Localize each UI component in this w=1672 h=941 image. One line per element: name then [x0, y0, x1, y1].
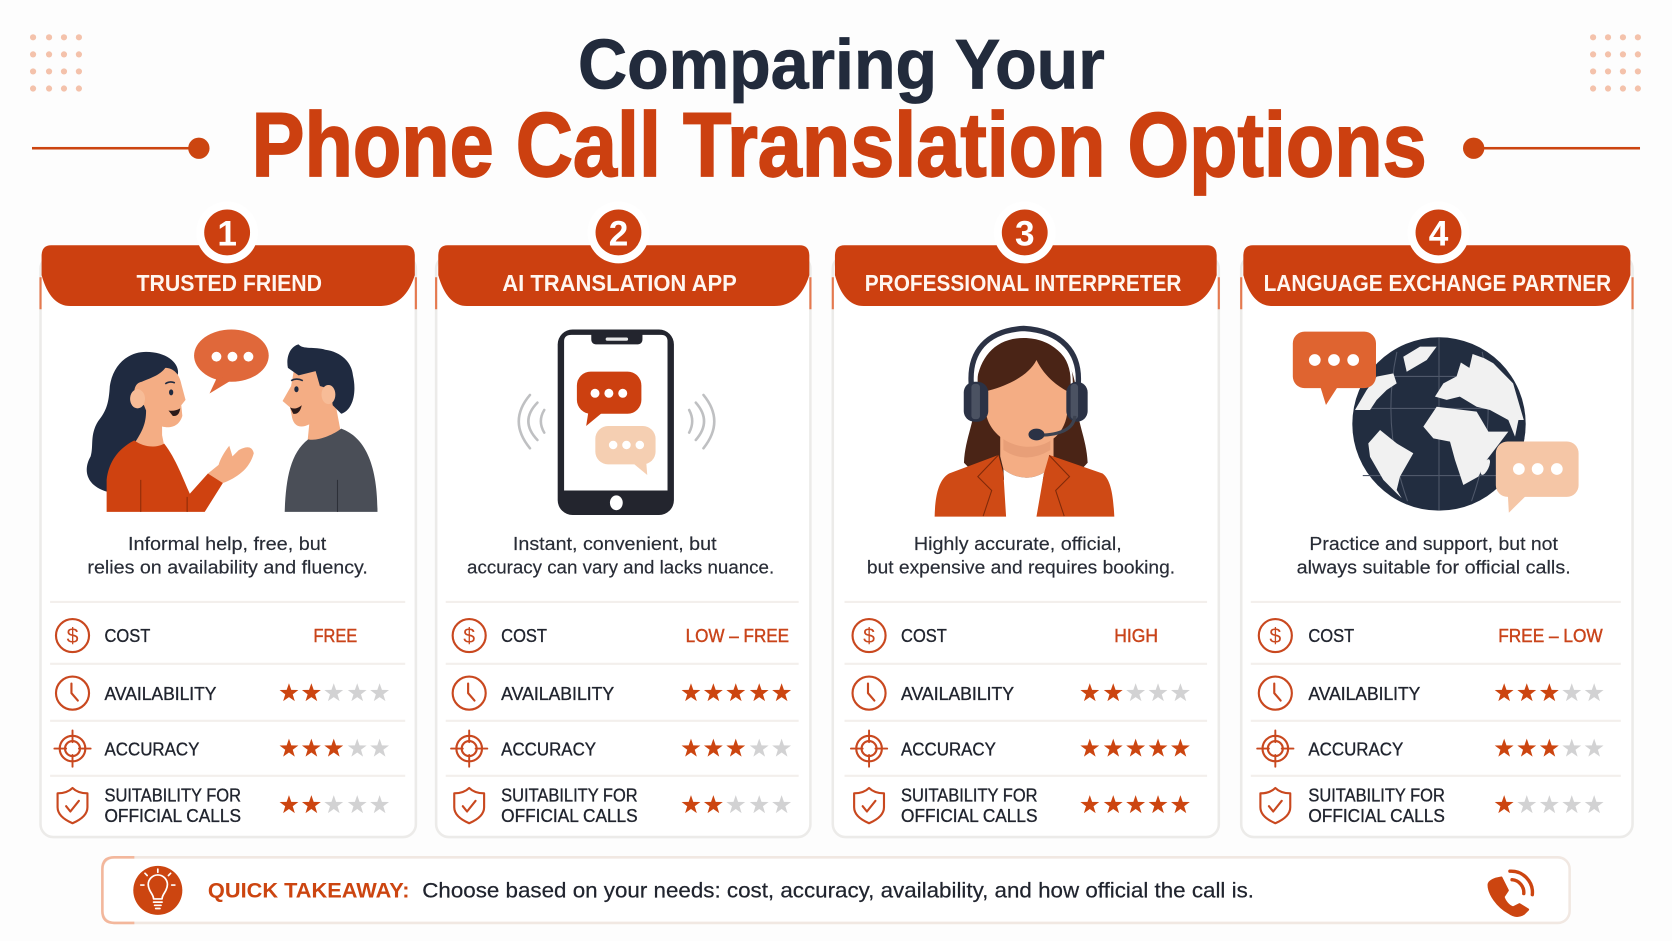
- description: accuracy can vary and lacks nuance.: [467, 557, 774, 578]
- title rule left: [32, 138, 210, 159]
- decorative dot grid left: [30, 34, 82, 92]
- row: cost: [56, 619, 357, 652]
- sound waves: [519, 395, 714, 448]
- description: [467, 533, 774, 578]
- description: Practice and support, but not: [1309, 533, 1559, 554]
- number badge: [1408, 202, 1469, 263]
- number badge: [588, 202, 649, 263]
- row: cost: [453, 619, 789, 652]
- header band: [42, 245, 415, 306]
- row: availability: AVAILABILITY: [901, 684, 1014, 704]
- callout: quick takeaway: [102, 857, 1570, 923]
- speech bubble peach: [1496, 441, 1579, 513]
- title rule right: [1463, 138, 1640, 159]
- row: suitability: OFFICIAL CALLS: [1308, 806, 1445, 826]
- row: accuracy: [54, 730, 389, 767]
- row: suitability: SUITABILITY FOR: [1308, 785, 1445, 805]
- description: always suitable for official calls.: [1297, 557, 1571, 578]
- panel: professional interpreter: [833, 202, 1219, 837]
- panel: trusted friend: [41, 202, 416, 837]
- description: Highly accurate, official,: [914, 533, 1122, 554]
- decorative dot grid right: [1590, 34, 1641, 92]
- row: availability: [1259, 677, 1604, 710]
- panel: language exchange partner: [1241, 202, 1633, 837]
- title: Comparing Your: [578, 25, 1105, 104]
- panel heading: TRUSTED FRIEND: [136, 270, 322, 296]
- speech bubble red: [577, 372, 641, 426]
- row: suitability: OFFICIAL CALLS: [105, 806, 241, 826]
- row: cost: COST: [501, 626, 547, 646]
- header band: [835, 245, 1217, 306]
- description: Informal help, free, but: [128, 533, 327, 554]
- takeaway label: QUICK TAKEAWAY:: [208, 878, 409, 902]
- row: cost: LOW – FREE: [686, 626, 789, 646]
- row: suitability: SUITABILITY FOR: [105, 785, 241, 805]
- row: suitability: [454, 785, 791, 826]
- row: suitability: [854, 785, 1190, 826]
- speech bubble orange: [1293, 332, 1376, 405]
- row: suitability: SUITABILITY FOR: [501, 785, 638, 805]
- description: [87, 533, 368, 578]
- panel heading: PROFESSIONAL INTERPRETER: [865, 270, 1182, 296]
- illustration: smartphone: [519, 330, 714, 515]
- title: [252, 25, 1427, 196]
- takeaway text: Choose based on your needs: cost, accuracy, availability, and how official the call is.: [422, 878, 1254, 902]
- number badge: 3: [1015, 214, 1035, 253]
- row: cost: [853, 619, 1158, 652]
- panel: ai translation app: [436, 202, 810, 837]
- number badge: 2: [609, 214, 628, 253]
- speech bubble peach: [595, 426, 656, 475]
- row: availability: AVAILABILITY: [105, 684, 216, 704]
- row: cost: $: [67, 624, 79, 648]
- row: suitability: [1260, 785, 1604, 826]
- row: cost: FREE – LOW: [1498, 626, 1604, 646]
- number badge: 1: [217, 214, 237, 253]
- row: accuracy: ACCURACY: [1308, 740, 1403, 760]
- number badge: [994, 202, 1056, 263]
- illustration: interpreter with headset: [935, 328, 1114, 517]
- row: cost: COST: [105, 626, 150, 646]
- row: cost: COST: [901, 626, 947, 646]
- row: accuracy: [851, 730, 1190, 767]
- row: accuracy: [1257, 730, 1604, 767]
- description: [1297, 533, 1571, 578]
- header band: [1243, 245, 1630, 306]
- row: cost: $: [863, 624, 875, 648]
- row: cost: COST: [1308, 626, 1354, 646]
- panel heading: AI TRANSLATION APP: [502, 270, 737, 296]
- header band: [438, 245, 809, 306]
- row: cost: [1259, 619, 1604, 652]
- icon: light bulb: [133, 866, 182, 915]
- illustration: globe with speech bubbles: [1293, 332, 1579, 513]
- row: suitability: OFFICIAL CALLS: [901, 806, 1038, 826]
- icon: phone: [1489, 871, 1532, 916]
- row: availability: [56, 677, 389, 710]
- row: cost: $: [463, 624, 475, 648]
- row: cost: FREE: [314, 626, 357, 646]
- row: availability: [453, 677, 791, 710]
- row: cost: HIGH: [1114, 626, 1158, 646]
- description: relies on availability and fluency.: [87, 557, 368, 578]
- title: Phone Call Translation Options: [252, 95, 1427, 196]
- row: availability: AVAILABILITY: [501, 684, 614, 704]
- number badge: 4: [1429, 214, 1449, 253]
- row: cost: $: [1269, 624, 1281, 648]
- description: but expensive and requires booking.: [867, 557, 1175, 578]
- row: accuracy: ACCURACY: [501, 740, 596, 760]
- row: accuracy: [451, 730, 791, 767]
- description: Instant, convenient, but: [513, 533, 717, 554]
- speech bubble: [194, 330, 269, 393]
- description: [867, 533, 1175, 578]
- row: accuracy: ACCURACY: [105, 740, 199, 760]
- panel heading: LANGUAGE EXCHANGE PARTNER: [1264, 270, 1611, 296]
- illustration: two people talking: [87, 330, 377, 512]
- row: suitability: SUITABILITY FOR: [901, 785, 1038, 805]
- row: suitability: [58, 785, 389, 826]
- row: availability: AVAILABILITY: [1308, 684, 1420, 704]
- row: availability: [853, 677, 1190, 710]
- row: suitability: OFFICIAL CALLS: [501, 806, 638, 826]
- row: accuracy: ACCURACY: [901, 740, 996, 760]
- number badge: [196, 202, 258, 263]
